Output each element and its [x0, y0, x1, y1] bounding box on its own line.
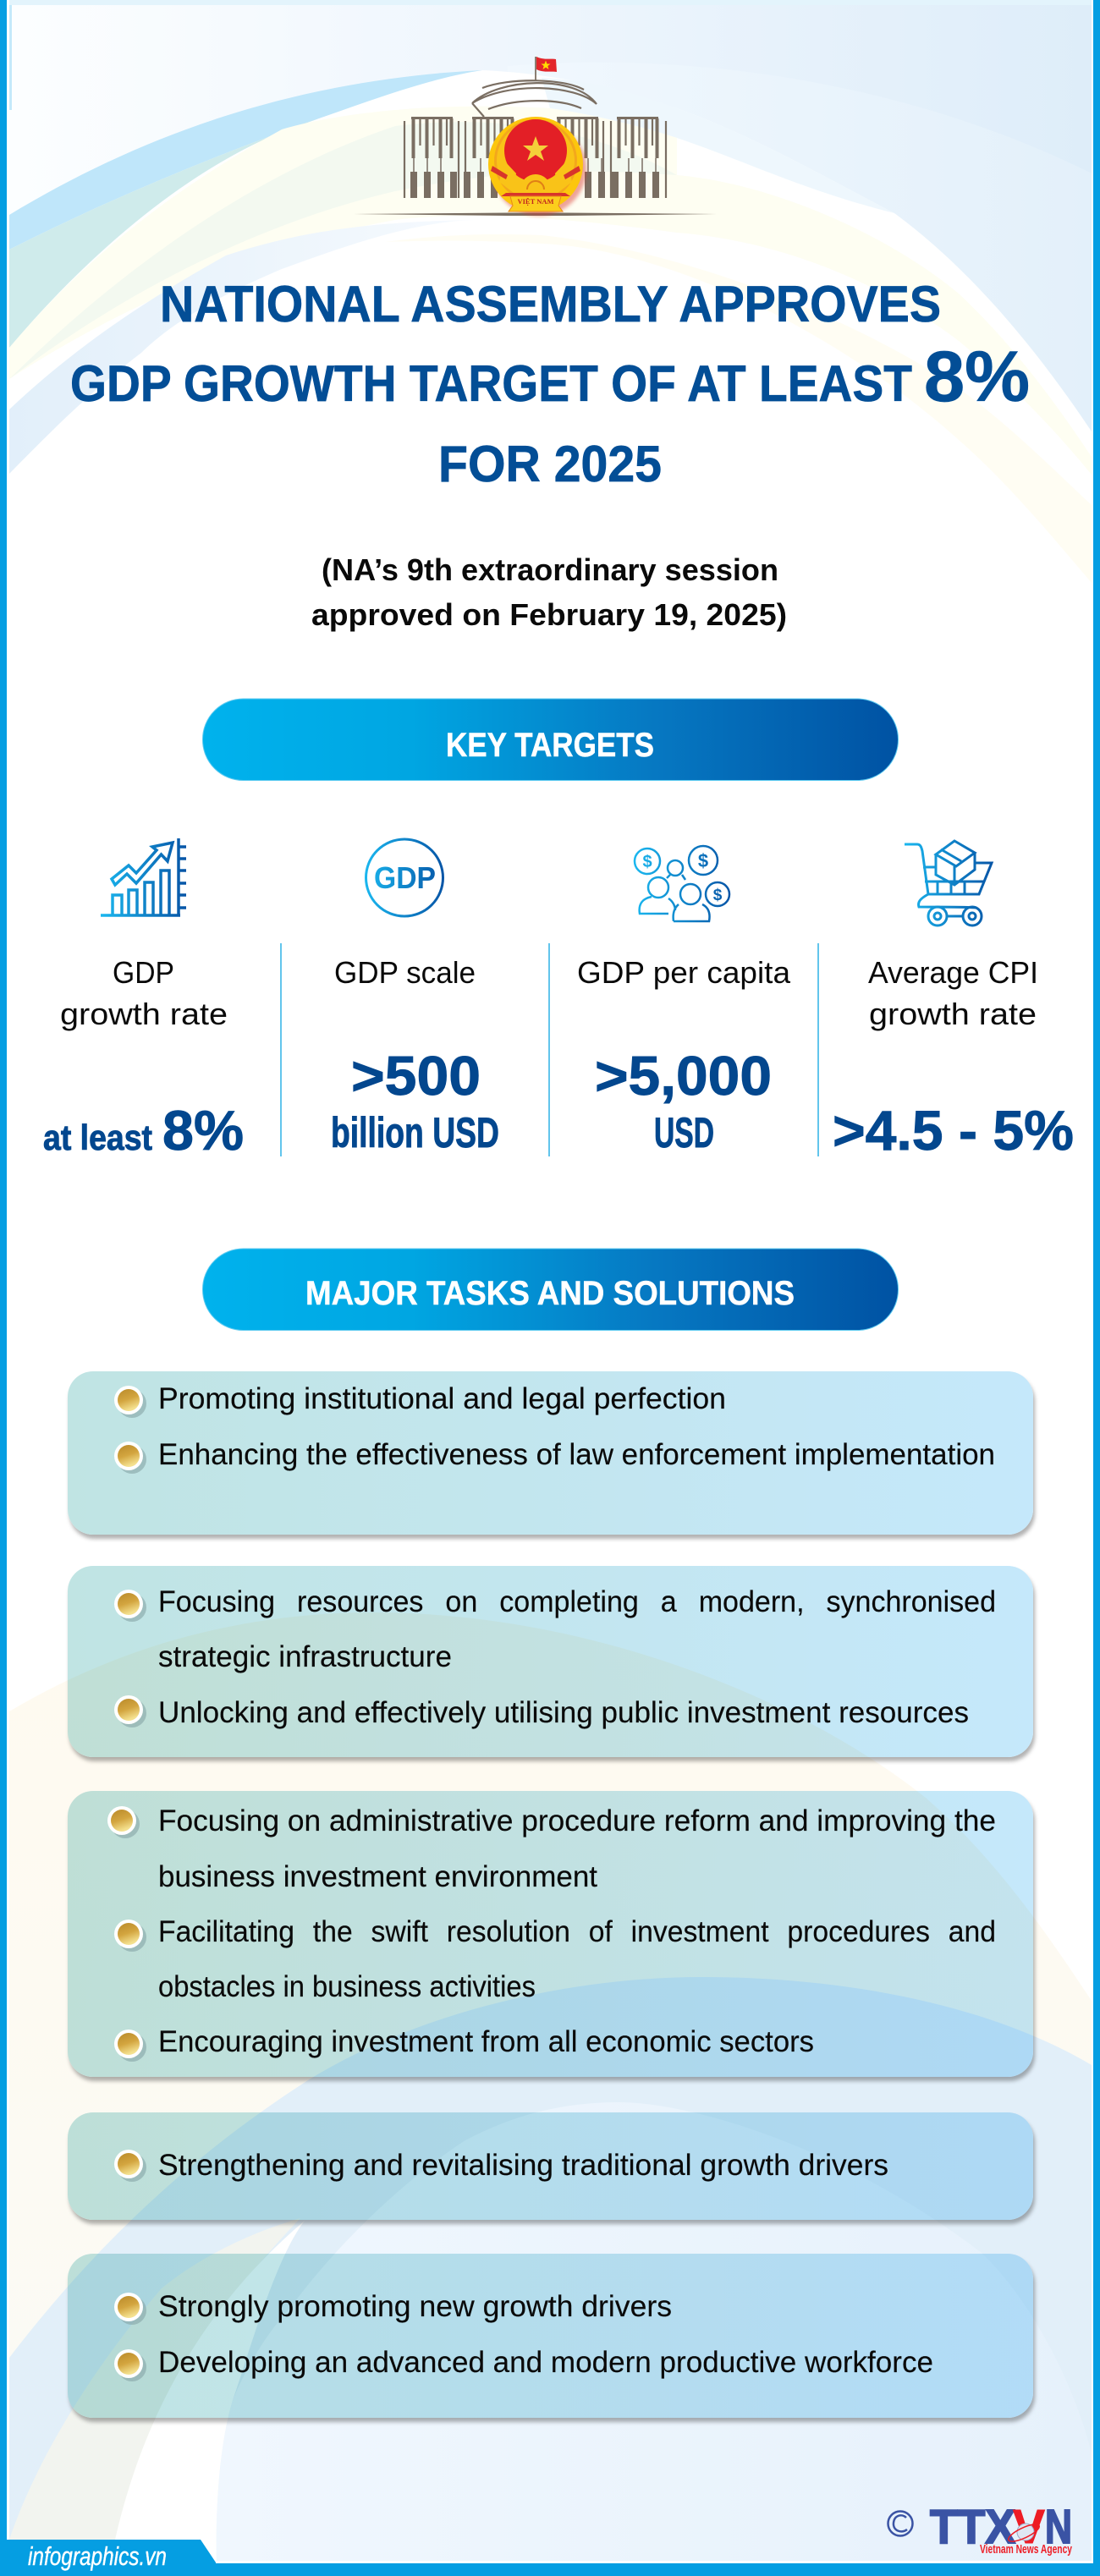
title: GDP GROWTH TARGET OF AT LEAST [70, 355, 912, 412]
icon: people with coins: $ [698, 850, 708, 871]
subtitle [311, 552, 787, 632]
globe [1006, 2521, 1042, 2545]
panel text: strategic infrastructure [158, 1640, 452, 1673]
target: GDP growth rate: at least [43, 1118, 152, 1157]
panel text [158, 1804, 996, 2058]
section header: key targets: KEY TARGETS [446, 727, 654, 764]
target: average CPI growth rate: >4.5 - 5% [833, 1099, 1074, 1162]
icon: people with coins: $ [642, 853, 652, 871]
target: GDP per capita [577, 955, 791, 1156]
section header: major tasks and solutions [203, 1249, 899, 1330]
icon: people with coins: $ [713, 887, 723, 904]
panel text: Strengthening and revitalising traditional growth drivers [158, 2149, 888, 2182]
building dome [472, 80, 597, 117]
panel text [158, 2290, 933, 2379]
footer tab: infographics.vn: infographics.vn [28, 2541, 167, 2571]
target: GDP growth rate: growth rate [60, 997, 228, 1031]
logo: TTXVN Vietnam News Agency: TTX [930, 2500, 1015, 2554]
target: GDP scale: billion USD [331, 1109, 499, 1156]
target: GDP scale: >500 [351, 1045, 481, 1107]
subtitle: (NA’s 9th extraordinary session [322, 552, 778, 587]
panel text: Promoting institutional and legal perfection [158, 1382, 726, 1415]
title [70, 276, 1030, 492]
icon: GDP coin: GDP [374, 860, 436, 895]
logo: TTXVN Vietnam News Agency: V [1013, 2500, 1045, 2554]
target: GDP growth rate [43, 955, 244, 1162]
bullets [114, 1590, 146, 1727]
panel text [158, 1382, 995, 1471]
panel text: Unlocking and effectively utilising public investment resources [158, 1696, 969, 1729]
bullets [114, 2293, 146, 2381]
panel text: Enhancing the effectiveness of law enforcement implementation [158, 1438, 995, 1471]
panel: infrastructure [68, 1566, 1033, 1757]
flag [535, 57, 557, 81]
bullets [114, 1386, 146, 1474]
emblem [488, 117, 586, 216]
building colonnade [404, 117, 666, 198]
panel text: Facilitating the swift resolution of investment procedures and [158, 1915, 996, 1948]
panel text [158, 1585, 996, 1729]
target: GDP per capita: GDP per capita [577, 955, 791, 990]
panel text: Focusing resources on completing a modern, synchronised [158, 1585, 996, 1618]
dividers [280, 943, 819, 1156]
icon: growth chart [101, 838, 186, 915]
panel: administrative reform [68, 1791, 1033, 2077]
target: GDP growth rate: GDP [113, 955, 174, 990]
logo: TTXVN Vietnam News Agency: N [1045, 2500, 1072, 2554]
copyright mark [888, 2511, 912, 2536]
panel text: business investment environment [158, 1860, 597, 1893]
section header: key targets [203, 699, 899, 780]
subtitle: approved on February 19, 2025) [311, 597, 787, 632]
header illustration: National Assembly building and emblem [354, 57, 717, 216]
target: GDP per capita: USD [654, 1109, 714, 1156]
target: average CPI growth rate: Average CPI [868, 955, 1038, 990]
icon: GDP coin [366, 839, 443, 916]
panel text: Strongly promoting new growth drivers [158, 2290, 672, 2323]
panel text: Developing an advanced and modern productive workforce [158, 2346, 933, 2379]
footer tab: infographics.vn [0, 2540, 216, 2576]
panel text: Encouraging investment from all economic sectors [158, 2025, 814, 2058]
title: NATIONAL ASSEMBLY APPROVES [160, 276, 941, 332]
icon: people with coins [635, 846, 729, 921]
panel: traditional growth drivers [68, 2112, 1033, 2220]
target: GDP scale [331, 955, 499, 1156]
target: GDP growth rate: 8% [162, 1099, 244, 1162]
title: FOR 2025 [438, 436, 662, 492]
bullet [114, 2150, 146, 2182]
target: GDP scale: GDP scale [334, 955, 476, 990]
target: average CPI growth rate [833, 955, 1074, 1162]
section header: major tasks and solutions: MAJOR TASKS AND SOLUTIONS [305, 1275, 795, 1312]
emblem ribbon text: VIỆT NAM [517, 197, 554, 206]
target: GDP per capita: >5,000 [595, 1045, 772, 1107]
panel: institutions [68, 1371, 1033, 1535]
title: 8% [924, 337, 1030, 416]
ground line [354, 213, 717, 216]
panel text: obstacles in business activities [158, 1970, 536, 2003]
icon: shopping cart [905, 841, 992, 925]
target: average CPI growth rate: growth rate [869, 997, 1037, 1031]
panel: new growth drivers [68, 2254, 1033, 2418]
panel text: Focusing on administrative procedure reform and improving the [158, 1804, 996, 1837]
logo: TTXVN Vietnam News Agency [888, 2500, 1072, 2557]
bullets [107, 1806, 146, 2062]
